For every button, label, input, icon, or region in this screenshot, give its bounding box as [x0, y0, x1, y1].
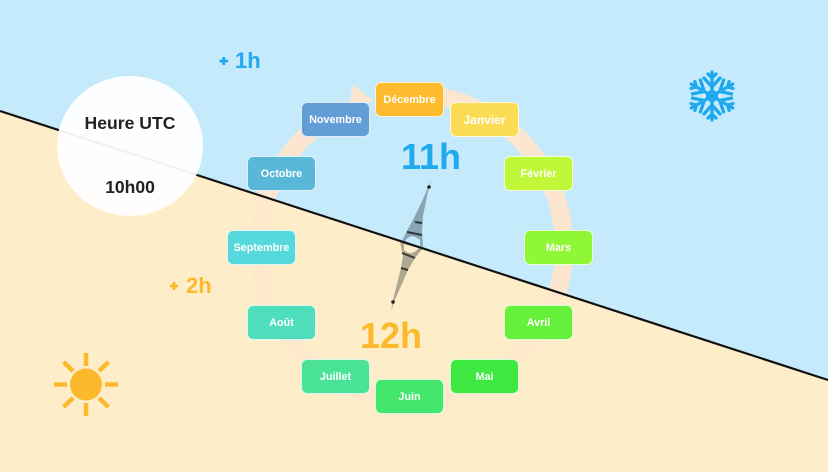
plus sign near 2h: [170, 282, 178, 290]
month: Juillet: Juillet: [320, 371, 351, 383]
month: Septembre: [227, 230, 296, 265]
month: Janvier: [450, 102, 519, 137]
label: 12h: 12h: [360, 315, 422, 356]
icon: Eiffel tower and mirrored reflection: [391, 180, 431, 312]
month: Mars: Mars: [546, 242, 571, 254]
label: 11h: 11h: [401, 136, 461, 177]
month: Septembre: Septembre: [234, 242, 289, 254]
month: Août: [247, 305, 316, 340]
month: Novembre: Novembre: [309, 114, 362, 126]
month: Juin: Juin: [398, 391, 421, 403]
month: Octobre: Octobre: [261, 168, 302, 180]
month: Novembre: [301, 102, 370, 137]
label: plus two hours: 2h: [186, 273, 212, 298]
month: Août: Août: [269, 317, 294, 329]
month: Février: [504, 156, 573, 191]
month: Juillet: [301, 359, 370, 394]
timezone boundary line: [0, 111, 828, 380]
sand tint over lower ring: [0, 112, 828, 472]
month: Mars: [524, 230, 593, 265]
month: Décembre: Décembre: [383, 94, 436, 106]
month: Décembre: [375, 82, 444, 117]
summer sand zone: [0, 111, 828, 472]
month: Avril: Avril: [527, 317, 550, 329]
circular month arrow: [258, 85, 564, 400]
plus sign near 1h: [220, 57, 228, 65]
month: Février: Février: [520, 168, 556, 180]
time value: 10h00: [105, 177, 155, 197]
month: Mai: [450, 359, 519, 394]
icon: snowflake: [687, 72, 737, 120]
month: Mai: Mai: [476, 371, 494, 383]
month: Avril: [504, 305, 573, 340]
UTC clock circle: [57, 76, 203, 216]
label: plus one hour: 1h: [235, 48, 261, 73]
lower reflected tower: [391, 242, 423, 312]
upper tower: [402, 180, 431, 247]
icon: sun: [54, 353, 118, 416]
heading: Heure UTC: Heure UTC: [85, 113, 175, 133]
month: Janvier: Janvier: [463, 113, 506, 127]
month: Juin: [375, 379, 444, 414]
month: Octobre: [247, 156, 316, 191]
